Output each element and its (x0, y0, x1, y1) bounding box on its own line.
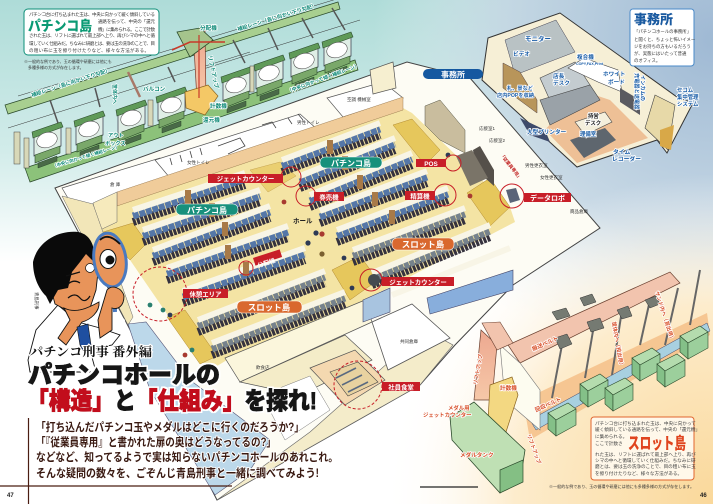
intro paragraph: 「打ち込んだパチンコ玉やメダルはどこに行くのだろうか?」 (36, 420, 304, 434)
room labels small: 男性更衣室 (525, 162, 548, 169)
pachinko island explanation panel: 環していく仕組みだ。ちなみに研磨とは、要は玉の洗浄のことで、目 (29, 40, 155, 47)
rest area tag: 休憩エリア (190, 290, 222, 298)
pachinko island explanation panel (24, 9, 159, 55)
pachinko island footnote (24, 58, 112, 70)
peach shadow band (523, 313, 710, 440)
pachinko machines row (32, 32, 353, 168)
slot inset labels: メダルタンク (460, 451, 494, 459)
face and neck (50, 248, 98, 312)
restaurant and staff room block (240, 335, 385, 440)
shirt and shoulders (28, 305, 120, 372)
pillar block (370, 62, 396, 94)
white lift frame (500, 345, 540, 430)
page number 47: 47 (7, 493, 14, 499)
back rooms (62, 82, 403, 210)
pachinko island green tags: パチンコ島 (331, 158, 371, 168)
vending tag: 券売機 (319, 192, 339, 202)
slot inset labels: リフトアップ (525, 433, 543, 466)
settlement tag (405, 184, 456, 206)
office text labels: ホワイト (603, 71, 625, 78)
intro paragraph: 「『従業員専用』と書かれた扉の奥はどうなってるの?」 (36, 435, 276, 449)
slot inset labels (423, 290, 677, 466)
red section labels and circles: パチンコ島 (187, 205, 227, 215)
room labels small: 女性トイレ (187, 159, 210, 166)
blue lower conveyor (530, 323, 710, 430)
distributor tag: 分配機 (257, 257, 276, 270)
office tag: 事務所 (441, 70, 465, 80)
lift tube and distributor (172, 28, 225, 115)
inset diagram: pachinko island mechanism (5, 0, 360, 182)
pachinko island footnote: 多種多様の方式が存在します。 (28, 64, 84, 70)
office text labels: 集中管理 (677, 93, 699, 101)
slot footnote: ※一般的な例であり、玉の循環や研磨には他にも多種多様の方式が存在します。 (549, 483, 694, 489)
inset text labels: 補給レーン（島に向かい下り勾配） (236, 1, 318, 33)
slot explanation panel: 緩く傾斜している通路を伝って、中央の「還元機」 (595, 426, 700, 433)
slot inset labels: サンド内へ（賞出用） (653, 290, 677, 342)
office explanation panel: のオフィス。 (634, 58, 660, 63)
intro paragraph: そんな疑問の数々を、ごぞんじ青島刑事と一緒に調べてみよう! (36, 466, 319, 480)
main title: 「構造」と「仕組み」を探れ! (27, 388, 317, 415)
inset text labels: アウト (108, 132, 124, 139)
pachinko rows left (133, 173, 305, 303)
left wall strip (62, 196, 133, 325)
slot machine boxes (548, 326, 708, 436)
lower hall wall band (225, 300, 372, 382)
customers in hall (148, 153, 472, 357)
slot explanation panel: シマの中へと循環していく仕組みだ。ちなみに研 (595, 457, 696, 464)
inset text labels: （中央に向かって傾く補給レーン） (286, 62, 360, 95)
inset text labels (30, 1, 360, 170)
slot inset labels: メダル用 (448, 404, 470, 412)
office walls (482, 13, 693, 167)
inset text labels: バルコン (143, 86, 166, 93)
settlement tag: 精算機 (410, 192, 430, 200)
slot explanation panel: に集められる。 (595, 433, 627, 440)
data robot tag: データロボ (530, 194, 565, 202)
slot inset labels: 搬送ベルト (531, 334, 559, 353)
jet counter tag top: ジェットカウンター (217, 174, 274, 183)
office text labels: デスク (585, 119, 601, 127)
office text labels: 店長 (553, 73, 565, 80)
connecting pipes (50, 8, 345, 123)
blue glass panels (363, 270, 513, 322)
pachinko island explanation panel: された玉は、リフトに運ばれて最上部へ上り、再びシマの中へと循 (29, 32, 156, 39)
main title: パチンコホールの (28, 362, 220, 389)
vending tag (296, 186, 344, 206)
POS tag (416, 155, 461, 171)
office explanation panel: が、実態にはいたって普通 (634, 50, 687, 57)
office text labels: ビデオ (513, 50, 530, 58)
room labels small: 応接室1 (479, 125, 495, 132)
office explanation panel: 事務所 (634, 12, 673, 27)
office explanation panel (630, 9, 695, 66)
jet counter tag lower (360, 269, 454, 291)
pachinko island explanation panel: パチンコ台に打ち込まれた玉は、中央に向かって緩く傾斜している (29, 11, 155, 18)
slot inset labels: リフトアップ (472, 353, 485, 385)
rest area tag (133, 267, 228, 321)
office text labels: システム (677, 101, 699, 108)
medal tank green (450, 402, 525, 493)
staff room tag: 社員食堂 (388, 382, 414, 392)
office floor (545, 90, 648, 163)
room labels small: 空調 機械室 (347, 96, 371, 103)
slot rows lower right (353, 208, 510, 295)
office explanation panel: 「パチンコホールの事務所」 (634, 28, 691, 35)
distributor tag (239, 249, 282, 275)
slot explanation panel: パチンコ台に打ち込まれた玉は、中央に向かって (595, 420, 696, 427)
office tag (423, 69, 483, 80)
office shelves and desks (503, 20, 675, 158)
lower supply rail (25, 60, 358, 182)
slot island inset (423, 270, 710, 493)
office text labels: 理備室 (580, 130, 597, 138)
slot inset labels: 計数機 (500, 384, 517, 392)
pink lift column (474, 330, 497, 400)
slot island orange tags: スロット島 (402, 240, 445, 250)
slot explanation panel (591, 417, 700, 480)
hall back wall peach strip (117, 97, 403, 206)
tiled entrance floors (103, 119, 510, 364)
office text labels: タイム (613, 148, 630, 156)
page rules (0, 418, 478, 504)
slot explanation panel: を擦り付けたりなど、様々な方法がある。 (595, 470, 682, 477)
office text labels: 大型プリンター (527, 128, 567, 136)
jet counter tag lower: ジェットカウンター (389, 278, 447, 286)
slot inset labels: 回収ベルト (534, 396, 562, 414)
pachinko island explanation panel: パチンコ島 (28, 18, 92, 34)
room labels small: ホール (293, 217, 313, 225)
white backing (25, 290, 125, 360)
office text labels (497, 34, 699, 163)
counter machine yellow (488, 377, 518, 435)
detective character (25, 231, 130, 372)
room labels small: 女性更衣室 (540, 174, 563, 181)
staff room tag (334, 361, 420, 409)
office text labels: レコーダー (612, 155, 641, 163)
inset text labels: 補給レーン（島に向かい下り勾配） (30, 66, 111, 99)
room labels small: 「従業員専用」 (498, 152, 523, 181)
office text labels: 札、景など (507, 84, 534, 92)
pachinko island explanation panel: 機」に集められる。ここで計数 (98, 26, 156, 33)
inset text labels: 計数機 (210, 102, 227, 110)
office text labels: ボード (608, 78, 625, 86)
room labels small: 応接室2 (489, 137, 505, 144)
pachinko island explanation panel: 通路を伝って、中央の「還元 (98, 18, 156, 25)
room labels small (110, 96, 588, 371)
slot island orange tags (392, 238, 454, 250)
office text labels: デスク (553, 79, 570, 87)
intro paragraph: などなど、知ってるようで実は知らないパチンコホールのあれこれ。 (36, 450, 338, 464)
hand holding glass (98, 287, 124, 338)
room labels small: 飲食店 (256, 364, 270, 371)
room labels small: 男性トイレ (297, 119, 320, 126)
slot inset labels: 筐体内へ（投出用） (610, 321, 626, 368)
upper supply rail (5, 2, 340, 114)
data robot tag (500, 184, 571, 208)
pink upper supply belt (508, 272, 680, 363)
pachinko island footnote: ※一般的な例であり、玉の循環や研磨には他にも (24, 58, 112, 64)
main building floor plan (55, 62, 600, 500)
office explanation panel: ジをお持ちの方もいるだろう (634, 43, 691, 50)
tie (77, 324, 91, 356)
resting arm and hand (58, 302, 99, 345)
room labels small: 商品倉庫 (570, 208, 588, 215)
jet counter tag top (208, 167, 301, 187)
side pegs (14, 66, 254, 168)
pachinko island green tags (320, 157, 382, 168)
grey slot hoppers and pipes (552, 270, 700, 398)
slot inset labels: ジェットカウンター (423, 411, 472, 419)
pachinko rows upper right (282, 123, 448, 242)
building outer slab (55, 62, 600, 500)
magnifying glass (90, 231, 130, 312)
office text labels: 持営 (588, 112, 599, 120)
slot explanation panel: ここで計数さ (595, 440, 623, 447)
main title (27, 362, 317, 415)
office text labels: セコム (677, 87, 694, 94)
slot rows left (198, 271, 345, 355)
inset text labels: （中央に向かって傾く補給レーン） (52, 143, 120, 170)
name caption: 青島刑事 (33, 292, 40, 310)
eye and brow (66, 264, 94, 301)
office text labels: 店内POPを収納 (497, 91, 534, 99)
outer wall cream strip bottom (217, 330, 453, 500)
inset text labels: ボックス (105, 139, 126, 147)
red section labels and circles (133, 69, 571, 409)
toilet stall lines (170, 114, 303, 165)
red section labels and circles: スロット島 (248, 302, 291, 312)
hall yellow floor (100, 108, 515, 366)
inset text labels: リフトアップ (206, 55, 220, 90)
office text labels: COPY,FAX,Print (576, 62, 604, 66)
office text labels: 充電器と送電器 (633, 73, 641, 110)
office inset (482, 9, 699, 167)
room labels small: 共同倉庫 (400, 338, 418, 345)
guide lines (8, 0, 360, 128)
left cream block (93, 192, 117, 230)
page number 46: 46 (700, 493, 707, 499)
inset text labels: 還元機 (203, 116, 220, 124)
inset text labels: 筐体内へ (111, 84, 118, 104)
office back shelves behind POS (425, 100, 494, 186)
POS tag: POS (424, 161, 438, 168)
long blue entry corridor (128, 322, 270, 495)
series subtitle: パチンコ刑事 番外編 (30, 344, 153, 359)
office text labels: モニター (525, 34, 551, 43)
office text labels: 複合機 (577, 53, 594, 61)
inset text labels: 分配機 (200, 24, 217, 32)
office explanation panel: と聞くと、ちょっと怖いイメー (634, 36, 695, 43)
shared warehouse room (372, 304, 450, 370)
hair (33, 232, 94, 304)
room labels small: 倉 庫 (110, 181, 121, 188)
office text labels: インカムの (639, 75, 646, 101)
slot explanation panel: スロット島 (628, 433, 686, 453)
slot explanation panel: れた玉は、リフトに運ばれて最上部へ上り、再び (595, 451, 696, 458)
intro paragraph (36, 420, 338, 480)
slot explanation panel: 磨とは、要は玉の洗浄のことで、目の粗い布に玉 (595, 463, 696, 470)
pachinko island explanation panel: の粗い布に玉を擦り付けたりなど、様々な方法がある。 (29, 47, 149, 54)
